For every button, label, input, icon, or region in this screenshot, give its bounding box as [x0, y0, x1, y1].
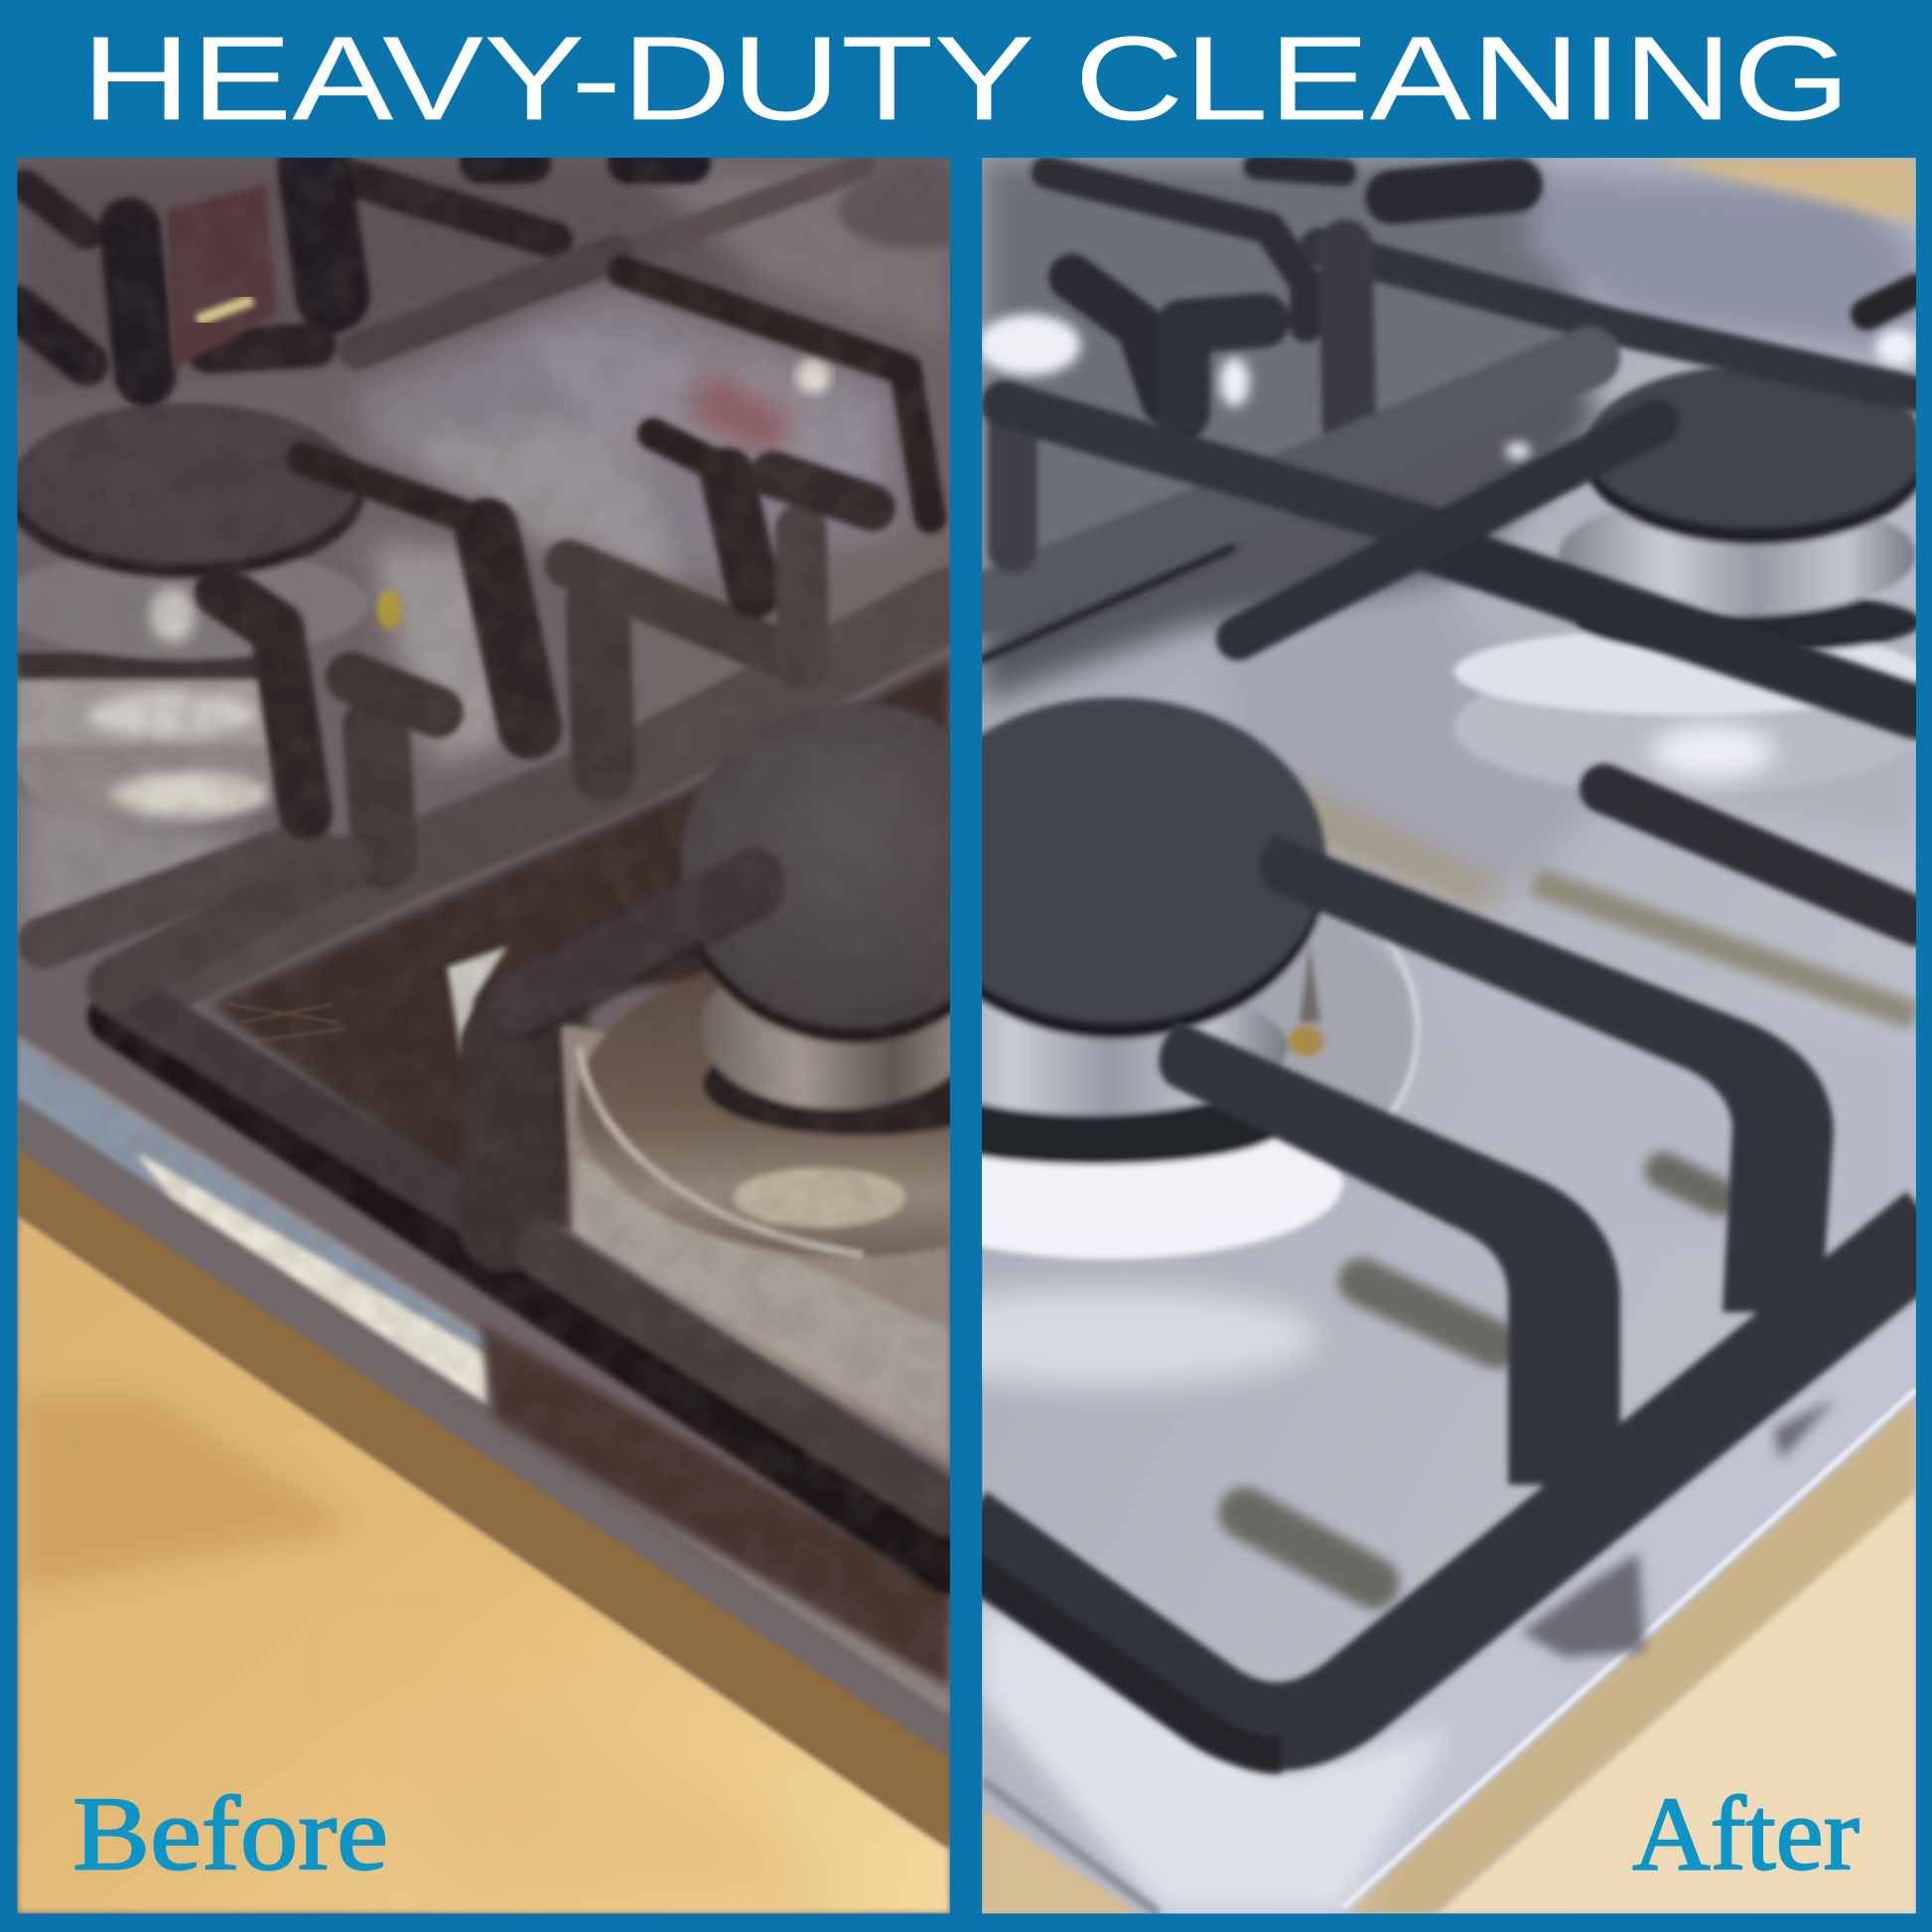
- rusty block top left: [167, 185, 277, 369]
- steel stove surface: [982, 158, 1916, 1913]
- dark greasy stove plate: [209, 659, 950, 1232]
- pan: [577, 949, 1124, 1257]
- wood corner top right: [1651, 158, 1916, 224]
- igniter: [1299, 942, 1320, 1023]
- front grate: [113, 863, 950, 1565]
- back grate: [982, 167, 1916, 712]
- panel: after photo: [875, 158, 1932, 1913]
- wood shadow band: [17, 1146, 950, 1849]
- wood sliver bottom left: [982, 1809, 1140, 1913]
- rim highlight line: [1343, 1390, 1916, 1907]
- cap: [678, 711, 1028, 1043]
- white glint on back plate: [796, 358, 830, 393]
- rim smudge shadow: [1522, 1553, 1645, 1657]
- stainless rim: [982, 1282, 1916, 1913]
- back bright spots: [977, 314, 1920, 460]
- cap: [17, 459, 367, 583]
- rim smudge: [1774, 1399, 1836, 1460]
- front burner: [561, 702, 1124, 1466]
- stainless rim: [17, 1035, 950, 1756]
- mottled back of the stove: [17, 158, 950, 949]
- tan reflection stripe: [1534, 881, 1916, 1017]
- label: after: After: [1632, 1776, 1860, 1892]
- rim left line: [982, 1780, 1159, 1913]
- title: HEAVY-DUTY CLEANING: [81, 11, 1851, 145]
- rim centre highlight: [982, 1601, 1453, 1913]
- back right burner top: [838, 170, 986, 249]
- counter wood: [17, 1213, 950, 1913]
- front grate: [961, 788, 1932, 1756]
- cap: [903, 706, 1327, 1038]
- back grate frame and fingers: [43, 434, 950, 973]
- ring: [700, 949, 976, 1109]
- ring: [894, 980, 1288, 1115]
- wood corner bottom right: [1436, 1484, 1916, 1913]
- ring: [0, 548, 369, 659]
- outer frame: [961, 1226, 1932, 1726]
- igniter: [377, 590, 402, 629]
- finger far right: [1604, 788, 1916, 921]
- scratches on plate: [228, 1004, 345, 1041]
- back-right burner: [1453, 364, 1928, 794]
- dim back of the stove: [982, 158, 1916, 1232]
- tan rim band: [1343, 1399, 1916, 1913]
- frame dark underside: [961, 1563, 1282, 1756]
- front burner: [875, 697, 1423, 1386]
- slot reflections on steel: [1244, 1171, 1719, 1584]
- grime texture: [17, 158, 950, 1759]
- steel plate below pan: [561, 1023, 950, 1466]
- back grate rear bars: [17, 163, 930, 517]
- panel: before photo: [17, 157, 950, 1914]
- stove surface background: [17, 158, 950, 1913]
- shadow under front grate: [481, 1324, 950, 1688]
- yellow glint on block: [198, 300, 252, 321]
- finger A: [1159, 1021, 1620, 1484]
- finger B: [1259, 835, 1834, 1312]
- back-left burner: [0, 403, 402, 832]
- bright plate edge: [448, 946, 507, 1059]
- pan: [942, 888, 1423, 1182]
- label: before: Before: [72, 1776, 388, 1892]
- bowl: [17, 737, 274, 826]
